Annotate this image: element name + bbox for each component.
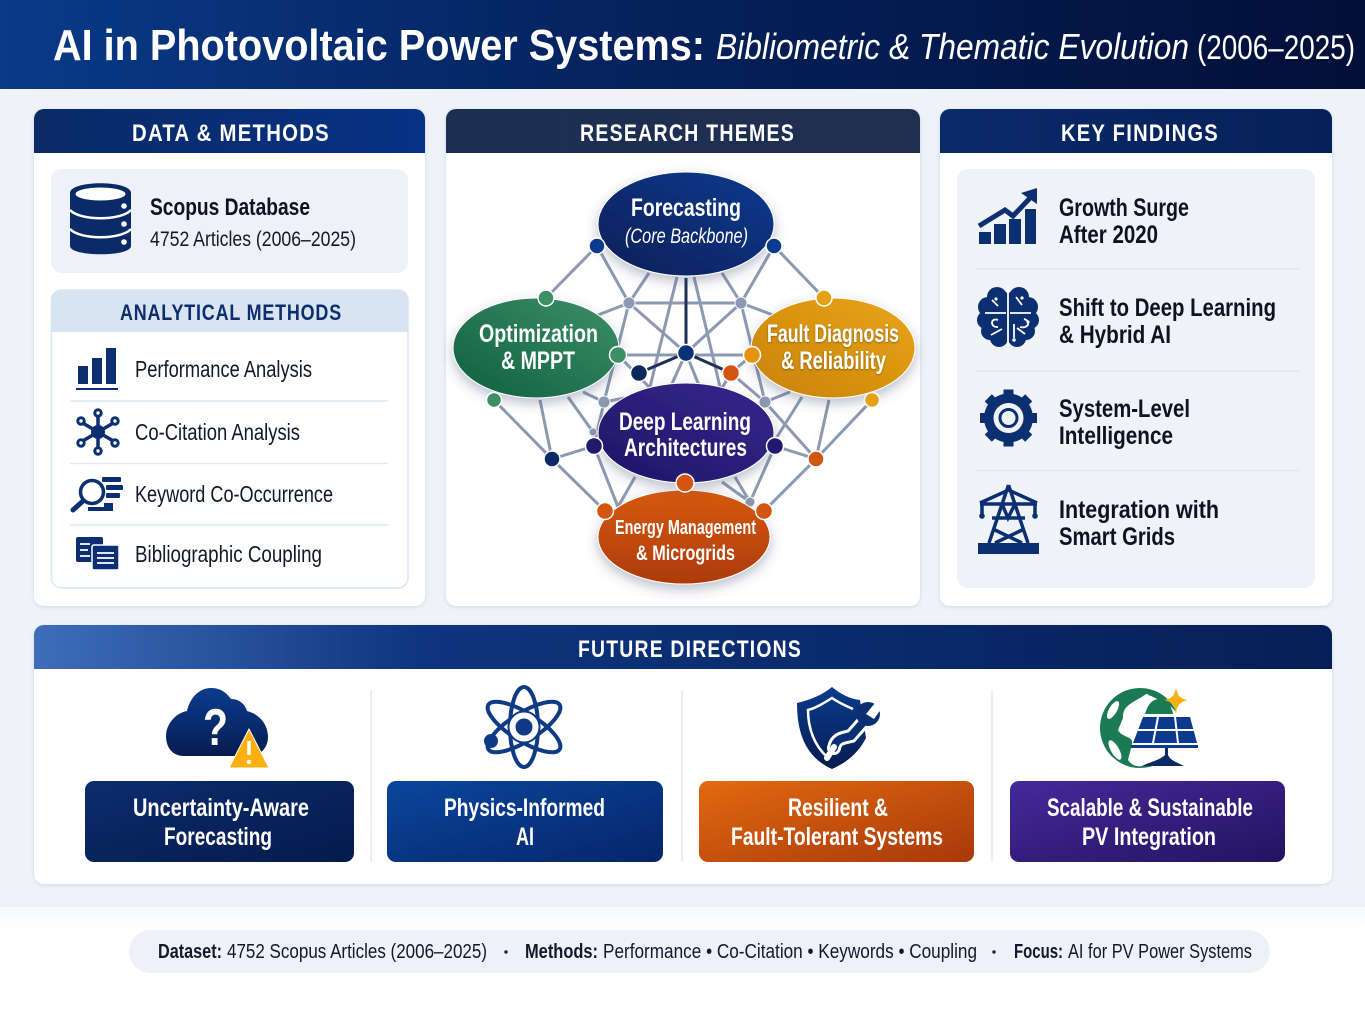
footer: focus [992, 941, 1252, 963]
direction: physics-informed AI [387, 687, 663, 862]
panel heading: future directions: FUTURE DIRECTIONS [578, 636, 802, 663]
method: performance analysis: Performance Analysis [135, 356, 312, 382]
direction: sustainable PV integration [1010, 687, 1285, 862]
box: physics-informed AI [387, 781, 663, 862]
footer: methods [504, 941, 977, 963]
box: scalable and sustainable PV integration [1010, 781, 1285, 862]
panel: data and methods [34, 109, 425, 606]
title banner: AI in Photovoltaic Power Systems: [53, 21, 705, 70]
panel heading: key findings [940, 109, 1332, 153]
title banner: Bibliometric & Thematic Evolution [716, 26, 1189, 67]
method: bibliographic coupling: Bibliographic Coupling [135, 541, 322, 567]
panel: key findings [940, 109, 1332, 606]
direction: uncertainty-aware forecasting [85, 688, 354, 862]
icon: shield with wrench [797, 687, 884, 769]
box: uncertainty-aware forecasting [85, 781, 354, 862]
network diagram [453, 172, 915, 584]
finding: smart grids: Smart Grids [1059, 523, 1175, 551]
theme: Fault Diagnosis and Reliability: Fault Diagnosis [767, 320, 899, 348]
box: physics-informed AI: Physics-Informed [444, 794, 605, 822]
method: performance analysis [76, 348, 312, 390]
text: article count: 4752 Articles (2006–2025) [150, 228, 356, 251]
icon: database [70, 183, 131, 254]
box: scalable and sustainable PV integration: PV Integration [1082, 823, 1216, 851]
footer: dataset [158, 941, 487, 963]
finding: system-level intelligence [980, 390, 1190, 450]
footer: dataset: Dataset: [158, 941, 222, 963]
footer: methods: Performance • Co-Citation • Keywords • Coupling [603, 941, 977, 963]
icon: cloud with warning [166, 688, 269, 768]
box: uncertainty-aware forecasting: Forecasting [164, 823, 272, 851]
box: physics-informed AI: AI [516, 823, 534, 851]
theme: Deep Learning Architectures [598, 383, 774, 483]
icon: atom [481, 687, 567, 767]
panel: future directions [34, 625, 1332, 884]
finding: smart grids [978, 485, 1219, 554]
finding: system-level intelligence: Intelligence [1059, 422, 1173, 450]
finding: system-level intelligence: System-Level [1059, 395, 1190, 423]
footer: dataset: 4752 Scopus Articles (2006–2025) [227, 941, 487, 963]
panel: research themes [446, 109, 920, 606]
icon: globe with solar panel [1100, 687, 1198, 768]
panel heading: future directions [34, 625, 1332, 669]
theme: Energy Management and Microgrids [598, 490, 770, 584]
card: findings list [957, 169, 1315, 588]
footer: methods: Methods: [525, 941, 598, 963]
theme: Forecasting: Forecasting [631, 194, 741, 222]
method: co-citation analysis: Co-Citation Analysis [135, 419, 300, 445]
panel heading: data and methods [34, 109, 425, 153]
footer: focus: Focus: [1014, 941, 1063, 963]
heading: analytical methods: ANALYTICAL METHODS [120, 300, 342, 325]
theme: Optimization and MPPT [453, 298, 619, 398]
theme: Optimization and MPPT: Optimization [479, 320, 598, 348]
theme: Fault Diagnosis and Reliability [751, 298, 915, 398]
method: keyword co-occurrence: Keyword Co-Occurrence [135, 481, 333, 507]
box: resilient and fault-tolerant systems: Resilient & [788, 794, 888, 822]
network nodes [486, 238, 880, 520]
text: Scopus Database: Scopus Database [150, 194, 310, 221]
theme: Forecasting: (Core Backbone) [625, 225, 748, 248]
panel heading: data and methods: DATA & METHODS [132, 120, 330, 147]
panel heading: research themes [446, 109, 920, 153]
finding: deep learning shift: & Hybrid AI [1059, 321, 1171, 349]
method: co-citation analysis [78, 410, 300, 454]
box: scalable and sustainable PV integration: Scalable & Sustainable [1047, 794, 1253, 822]
card: Scopus database [51, 169, 408, 273]
panel heading: key findings: KEY FINDINGS [1061, 120, 1219, 147]
finding: smart grids: Integration with [1059, 496, 1219, 524]
footer: focus: AI for PV Power Systems [1068, 941, 1252, 963]
theme: Fault Diagnosis and Reliability: & Reliability [781, 347, 886, 375]
box: resilient and fault-tolerant systems [699, 781, 974, 862]
box: resilient and fault-tolerant systems: Fault-Tolerant Systems [731, 823, 943, 851]
finding: growth surge [979, 188, 1189, 249]
theme: Energy Management and Microgrids: Energy Management [615, 517, 756, 539]
network links [494, 246, 872, 511]
title banner [0, 0, 1365, 89]
card: analytical methods [51, 290, 408, 588]
icon: cloud with warning: ? [203, 699, 228, 757]
finding: growth surge: After 2020 [1059, 221, 1158, 249]
panel heading: research themes: RESEARCH THEMES [580, 120, 795, 147]
finding: deep learning shift [977, 287, 1276, 349]
direction: resilient systems [699, 687, 974, 862]
method: bibliographic coupling [76, 537, 322, 570]
footer strip [0, 907, 1365, 1024]
theme: Energy Management and Microgrids: & Microgrids [636, 542, 735, 565]
theme: Deep Learning Architectures: Architectures [624, 434, 747, 462]
method: keyword co-occurrence [73, 477, 333, 511]
box: uncertainty-aware forecasting: Uncertainty-Aware [133, 794, 309, 822]
theme: Deep Learning Architectures: Deep Learning [619, 408, 751, 436]
finding: growth surge: Growth Surge [1059, 194, 1189, 222]
theme: Forecasting [598, 172, 774, 276]
finding: deep learning shift: Shift to Deep Learning [1059, 294, 1276, 322]
theme: Optimization and MPPT: & MPPT [501, 347, 575, 375]
